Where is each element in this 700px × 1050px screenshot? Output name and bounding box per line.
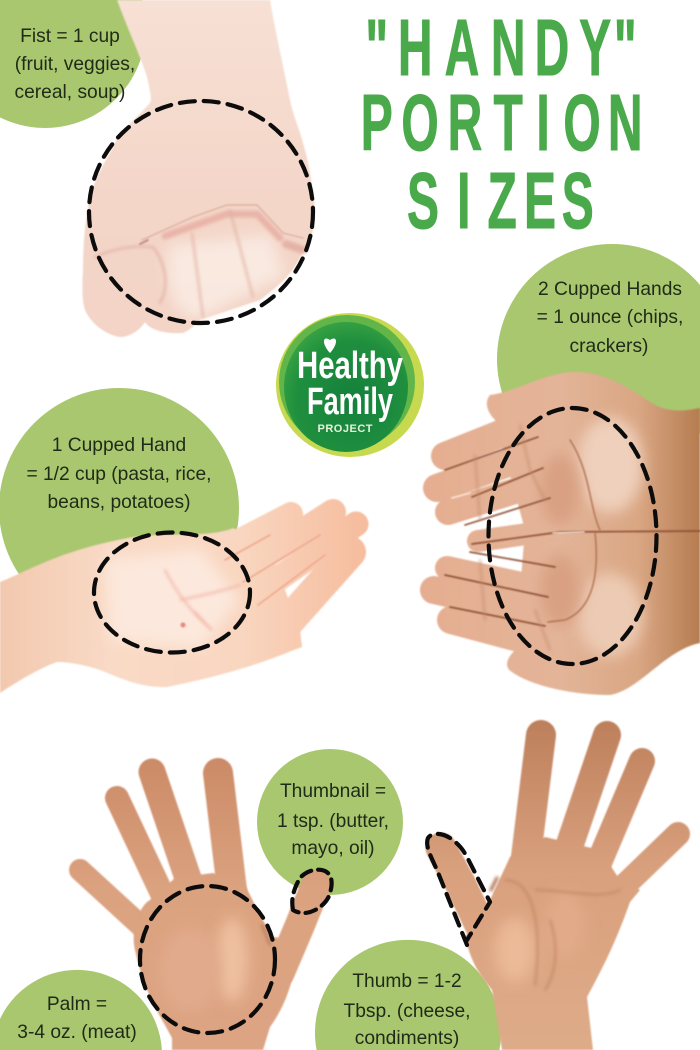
label: two cupped hands: = 1 ounce (chips, [537,307,683,328]
logo: Healthy Family Project [276,313,424,457]
dashed outline: one cupped hand [94,532,250,652]
dashed outline: thumb [427,834,490,945]
logo heart [324,338,336,353]
logo word: Family: Family [307,381,393,423]
label: fist: Fist = 1 cup [20,26,120,47]
icon: fist photo [82,0,315,337]
logo word: Project: PROJECT [318,423,373,435]
dashed outline: thumbnail [292,870,332,913]
dashed outline: two cupped hands [488,408,656,664]
label: thumb: condiments) [355,1028,459,1049]
title line: Handy: "HANDY" [365,2,637,92]
title line: Sizes: SIZES [407,155,594,245]
label: one cupped hand: beans, potatoes) [48,492,190,513]
label: thumbnail: 1 tsp. (butter, [277,811,389,832]
label: palm: Palm = [47,994,107,1015]
label: palm: 3-4 oz. (meat) [17,1022,137,1043]
icon: two cupped hands photo [434,372,700,695]
label: thumbnail: Thumbnail = [280,781,386,802]
label: two cupped hands: crackers) [570,336,648,357]
label: thumb: Thumb = 1-2 [352,971,462,992]
green circle: two cupped hands [497,244,700,474]
label: fist: (fruit, veggies, [15,54,135,75]
title [361,2,643,245]
logo word: Healthy: Healthy [297,345,403,387]
label: fist: cereal, soup) [15,82,125,103]
icon: one cupped hand photo [0,512,356,693]
green circle: one cupped hand [0,388,239,628]
green circle: palm [0,970,162,1050]
label: two cupped hands: 2 Cupped Hands [538,279,682,300]
label: thumbnail: mayo, oil) [291,838,375,859]
green circle: thumbnail [257,749,403,895]
title line: Portion: PORTION [361,77,643,167]
icon: right open hand photo [441,735,678,1050]
label: one cupped hand: = 1/2 cup (pasta, rice, [26,464,212,485]
green circle: thumb [315,940,501,1050]
dashed outline: fist [89,101,313,323]
dashed outline: palm [140,886,275,1033]
label: one cupped hand: 1 Cupped Hand [52,435,186,456]
green circle: fist [0,0,146,128]
icon: left open hand photo [80,772,316,1050]
label: thumb: Tbsp. (cheese, [344,1001,470,1022]
